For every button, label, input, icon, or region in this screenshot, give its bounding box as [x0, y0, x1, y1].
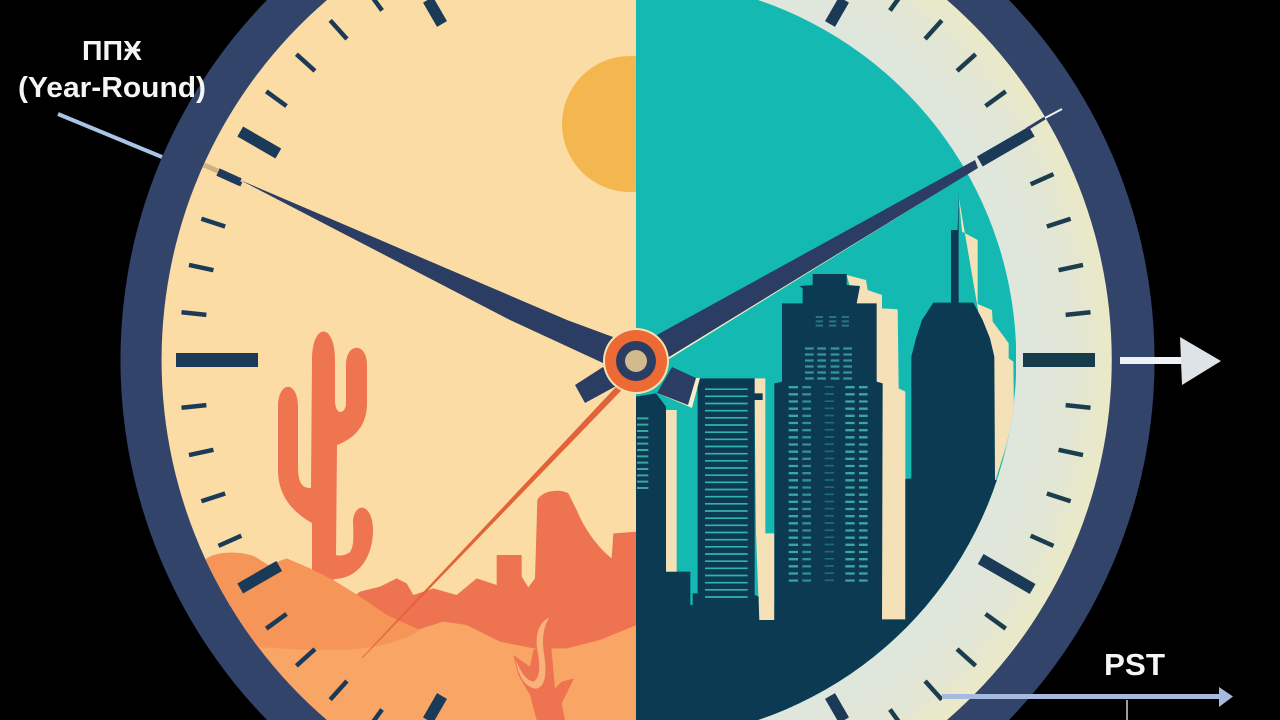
- teal sky: [636, 0, 1016, 720]
- minute ticks: left side: [182, 0, 382, 720]
- right clock hand: [655, 109, 1062, 408]
- label: top-left heading: [18, 35, 206, 104]
- clock face left: desert: [162, 0, 636, 720]
- left clock hand: [204, 165, 622, 403]
- desert sky: [160, 0, 636, 720]
- second hand: [362, 380, 627, 658]
- arrow: right: [1120, 337, 1221, 385]
- mesa silhouette: [340, 491, 637, 648]
- pointer line: top left: [58, 114, 162, 157]
- label line 2: (Year-Round): [18, 72, 206, 104]
- small foreground cactus: [513, 618, 574, 720]
- hour ticks: [176, 0, 1095, 720]
- spire building: [905, 192, 1014, 628]
- clock hub: [603, 328, 669, 394]
- foreground sand: [200, 613, 637, 720]
- desert layers: [200, 491, 637, 720]
- arrow: PST timeline: [942, 687, 1233, 720]
- clock face right: teal disc and city: [636, 0, 1016, 720]
- ribbed building: [693, 378, 774, 620]
- city ground: [636, 605, 927, 720]
- clock face right: [636, 0, 1112, 720]
- minute ticks: right side: [890, 0, 1090, 720]
- label line 1: ΠΠӾ: [82, 35, 142, 66]
- mid dune: [200, 552, 420, 650]
- sun: [562, 56, 636, 192]
- tall central building: [774, 274, 905, 623]
- left building: [636, 393, 690, 613]
- label: PST: PST: [1104, 647, 1165, 682]
- cactus: [278, 332, 373, 590]
